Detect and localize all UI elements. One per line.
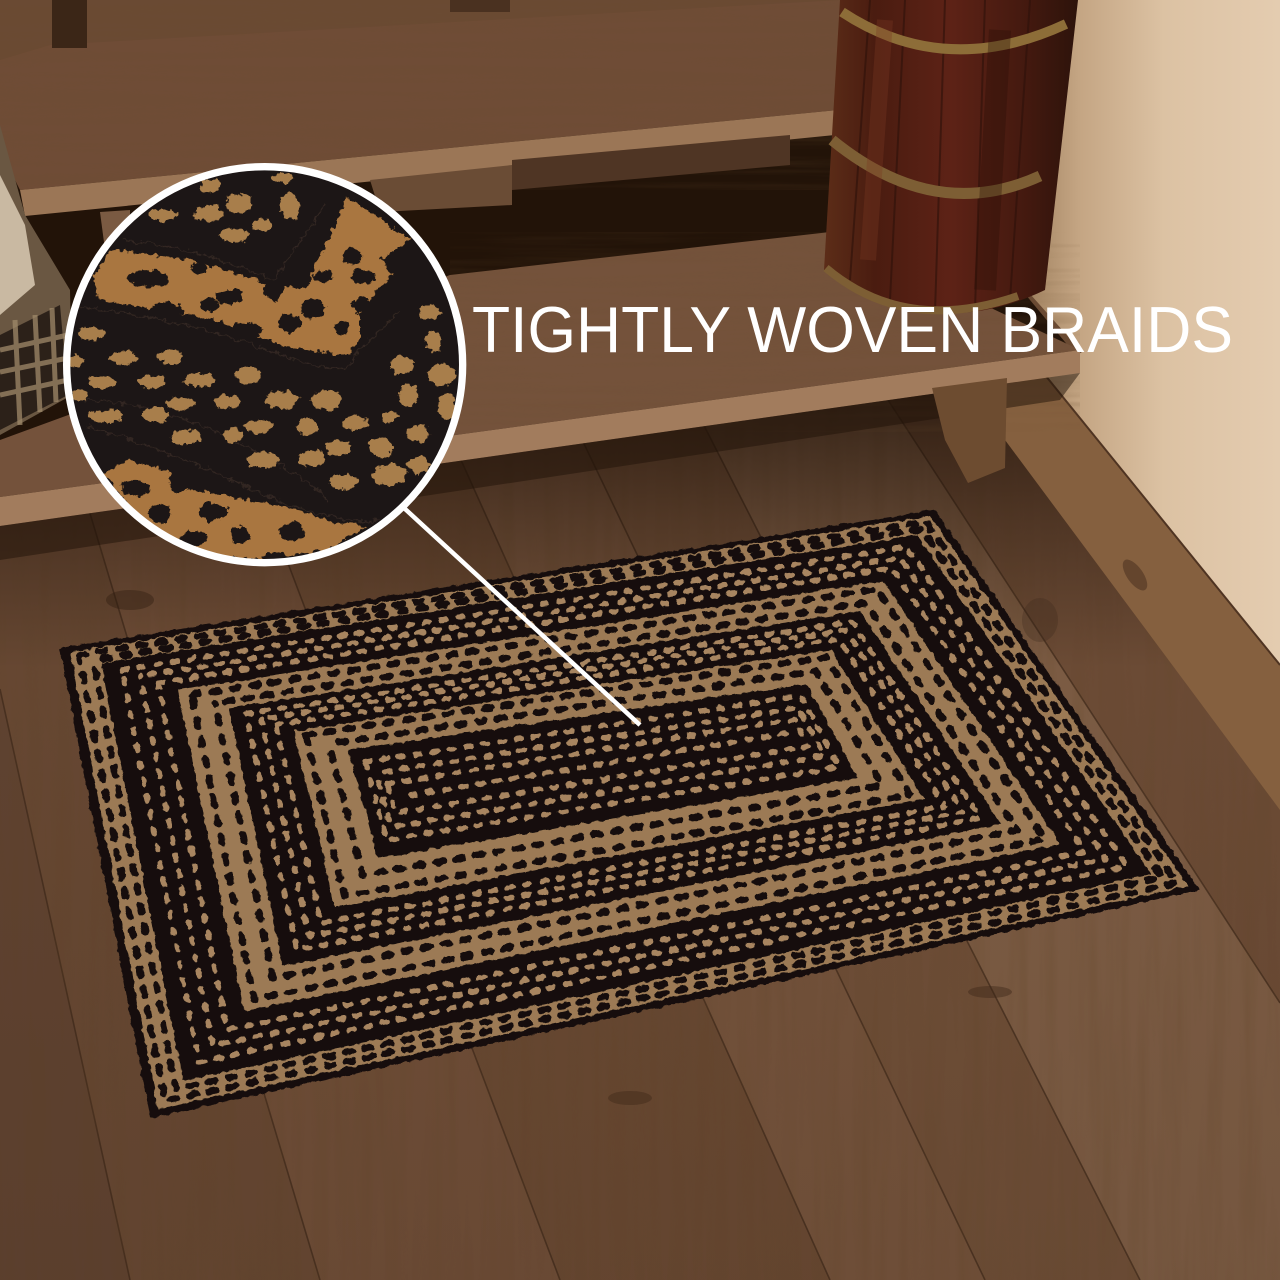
rug middle tan braid xyxy=(178,581,1060,1011)
rug outer black edge xyxy=(60,510,1200,1118)
heading: TIGHTLY WOVEN BRAIDS xyxy=(472,293,1233,366)
rug outer tan braid xyxy=(70,516,1188,1109)
magnified braid detail circle xyxy=(60,160,470,570)
step leg xyxy=(932,378,1007,483)
callout pointer line xyxy=(404,508,640,725)
lower step xyxy=(0,232,1080,560)
baseboard xyxy=(1005,375,1280,810)
rug dotted black band xyxy=(101,535,1151,1081)
wooden barrel xyxy=(824,0,1078,313)
wall xyxy=(1022,0,1280,665)
circle white border xyxy=(67,167,463,563)
rug center field xyxy=(348,684,858,858)
braided rug xyxy=(60,510,1200,1118)
tan braid area upper xyxy=(93,197,410,357)
rug inner tan braid xyxy=(294,650,924,907)
black braid ridges xyxy=(77,203,400,521)
wood floor xyxy=(0,380,1280,1280)
dark gap behind steps xyxy=(0,90,1080,520)
upper step xyxy=(0,0,840,250)
quilted pillow xyxy=(0,125,72,435)
rug inner dotted black band xyxy=(229,611,1001,966)
tan stitches in black braid xyxy=(69,173,456,489)
tan braid area lower xyxy=(103,460,367,560)
